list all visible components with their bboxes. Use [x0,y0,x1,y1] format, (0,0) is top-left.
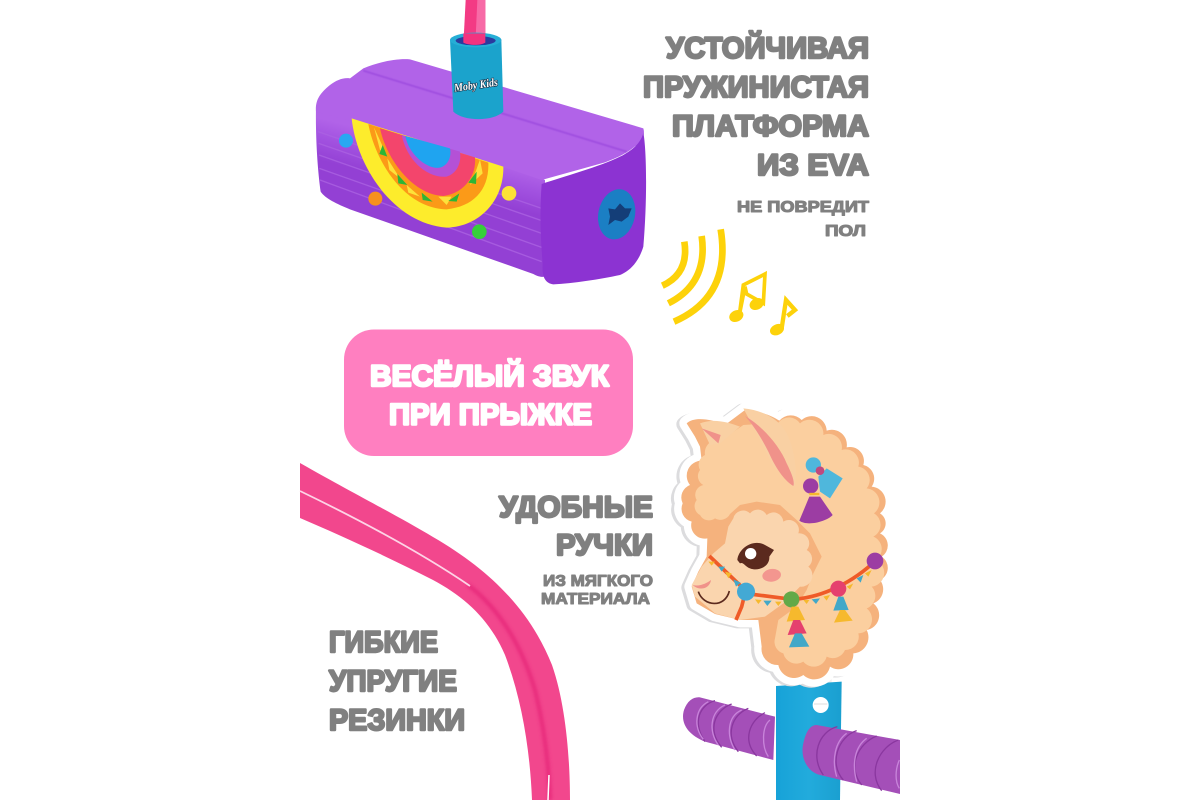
foam side shadow [678,411,885,680]
platform: purple EVA foam block [316,0,646,284]
cheek [762,568,782,583]
end face hole [593,186,640,243]
llama head handle [678,408,888,680]
white foam outline [681,410,888,679]
face [692,510,812,620]
blue tube with logo [450,33,503,119]
decal dots [339,134,516,239]
right grip [802,725,900,794]
subtext: handles [541,573,653,608]
nostril and mouth [693,580,729,603]
screw [813,697,829,713]
callout: fun sound [344,330,633,456]
white stem [781,670,832,685]
subtext: platform: ПОЛ [825,223,866,240]
callout: fun sound: ВЕСЁЛЫЙ ЗВУК [370,359,610,393]
heading: platform: ПРУЖИНИСТАЯ [643,71,869,104]
blue sleeve [776,682,842,800]
light fur [695,417,884,667]
bridle [709,556,873,620]
callout: fun sound: ПРИ ПРЫЖКЕ [389,398,592,432]
heading: handles: РУЧКИ [556,529,653,562]
front ear [743,408,796,487]
subtext: handles: МАТЕРИАЛА [541,591,650,608]
handle bars and blue sleeve [683,670,900,800]
pink rod at top [463,0,485,45]
heading: elastic bands: УПРУГИЕ [329,665,457,698]
platform side face [316,107,545,277]
logo: Moby Kids [453,77,499,95]
icon: sound waves and notes [662,229,795,338]
platform end face [541,133,646,284]
back ear [700,421,740,445]
heading: platform: УСТОЙЧИВАЯ [666,31,869,65]
ear tassels [799,457,843,523]
hanging tassels [787,597,853,647]
heading: platform [643,31,869,182]
heading: platform: ИЗ EVA [757,149,869,182]
subtext: platform [737,199,869,240]
platform top surface [316,59,644,180]
subtext: handles: ИЗ МЯГКОГО [543,573,653,590]
heading: handles [499,491,653,562]
bridle beads [737,553,883,607]
eye [737,543,774,569]
left grip [683,697,775,760]
bridle pennants [708,562,872,606]
rainbow decal [352,118,503,228]
pink elastic bands [300,463,570,800]
heading: elastic bands: РЕЗИНКИ [329,704,465,737]
subtext: platform: НЕ ПОВРЕДИТ [737,199,869,216]
heading: elastic bands [329,626,465,737]
fur rim [681,410,888,679]
heading: platform: ПЛАТФОРМА [672,110,869,143]
heading: handles: УДОБНЫЕ [499,491,653,524]
heading: elastic bands: ГИБКИЕ [329,626,438,659]
